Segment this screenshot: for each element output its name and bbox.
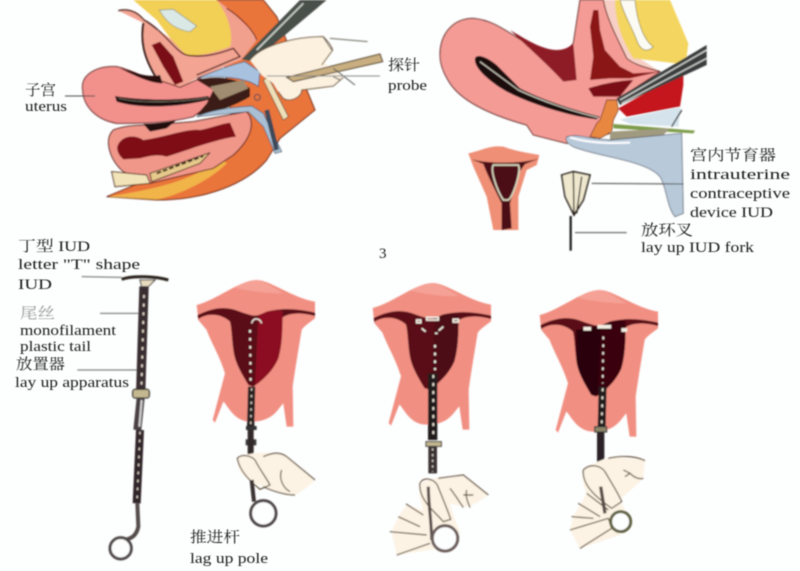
label: T-shape IUD: letter "T" shape: [18, 257, 140, 273]
uterus: [82, 66, 217, 123]
pale tissue: [603, 0, 660, 72]
shadow: [510, 30, 577, 82]
label: monofilament plastic tail: 尾丝: [20, 305, 55, 322]
body outline orange: [107, 0, 315, 200]
cervix: [590, 100, 618, 138]
hand: [250, 37, 343, 100]
figure number: 3: [379, 246, 386, 262]
label: intrauterine contraceptive device: 宫内节育器: [690, 146, 776, 164]
yellow fat: [123, 0, 231, 55]
label: lay up IUD fork: lay up IUD fork: [641, 240, 755, 256]
uterine cavity: [475, 56, 600, 119]
green line: [613, 124, 695, 133]
probe: [287, 54, 383, 82]
red tissue: [618, 72, 683, 117]
label: monofilament plastic tail: plastic tail: [20, 339, 91, 355]
label: intrauterine contraceptive device: intrauterine: [690, 167, 790, 183]
label: lay up pole: [190, 529, 268, 567]
forceps: [242, 0, 327, 62]
label: intrauterine contraceptive device: [690, 146, 790, 221]
icon: T-shape IUD on lay-up apparatus: [77, 277, 168, 559]
label: lay up apparatus: [15, 356, 129, 391]
label: lay up apparatus: lay up apparatus: [15, 375, 129, 391]
forceps: [617, 45, 707, 105]
label: lay up apparatus: 放置器: [16, 356, 65, 373]
label: probe: [388, 56, 427, 94]
label: probe: 探针: [388, 56, 420, 74]
label: T-shape IUD: IUD: [18, 277, 52, 293]
vagina with speculum interior: [197, 78, 250, 115]
label: lay up pole: 推进杆: [190, 529, 240, 546]
uterine cavity: [115, 96, 210, 106]
hand: [570, 457, 645, 548]
speculum: [566, 133, 683, 217]
pale blue: [620, 107, 681, 127]
label: lay up IUD fork: 放环叉: [641, 222, 693, 239]
tissue pink right band: [217, 0, 257, 59]
panel: step 1 insertion: [197, 280, 315, 526]
label: lay up pole: lag up pole: [190, 551, 268, 567]
small uterus with IUD: [468, 146, 539, 230]
label: uterus: uterus: [25, 99, 67, 115]
bladder: [159, 9, 197, 32]
yellow fat: [615, 0, 688, 63]
lower tissue: [109, 112, 251, 183]
speculum blades: [197, 62, 260, 87]
label: intrauterine contraceptive device: device IUD: [690, 205, 773, 221]
vagina anterior dark: [152, 42, 183, 85]
panel: IUD placement view with fork: [440, 0, 707, 251]
panel: step 2 release: [373, 283, 491, 555]
rectum lumen: [117, 123, 236, 159]
label: probe: probe: [388, 78, 427, 94]
panel: step 3 withdrawal: [540, 290, 658, 548]
artwork: [65, 0, 707, 559]
label: uterus: 子宫: [25, 82, 56, 99]
yellow strip lower: [108, 157, 227, 199]
label: T-shape IUD: 丁型 IUD: [18, 237, 90, 255]
tissue pink upper: [118, 10, 242, 87]
label: monofilament plastic tail: monofilament: [20, 323, 117, 339]
panel: uterine probe examination: [65, 0, 383, 200]
label: T-shape IUD: [18, 237, 140, 293]
uterus leader: [65, 94, 95, 97]
icon: IUD fork: [562, 172, 590, 251]
hand: [237, 452, 315, 495]
label: intrauterine contraceptive device: contraceptive: [690, 186, 790, 202]
label: monofilament plastic tail: [20, 305, 117, 355]
lumen: [590, 10, 660, 80]
label: uterus: [25, 82, 67, 115]
hand: [392, 475, 488, 555]
spine blocks: [112, 172, 150, 187]
uterus: [440, 0, 660, 143]
label: lay up IUD fork: [641, 222, 755, 256]
